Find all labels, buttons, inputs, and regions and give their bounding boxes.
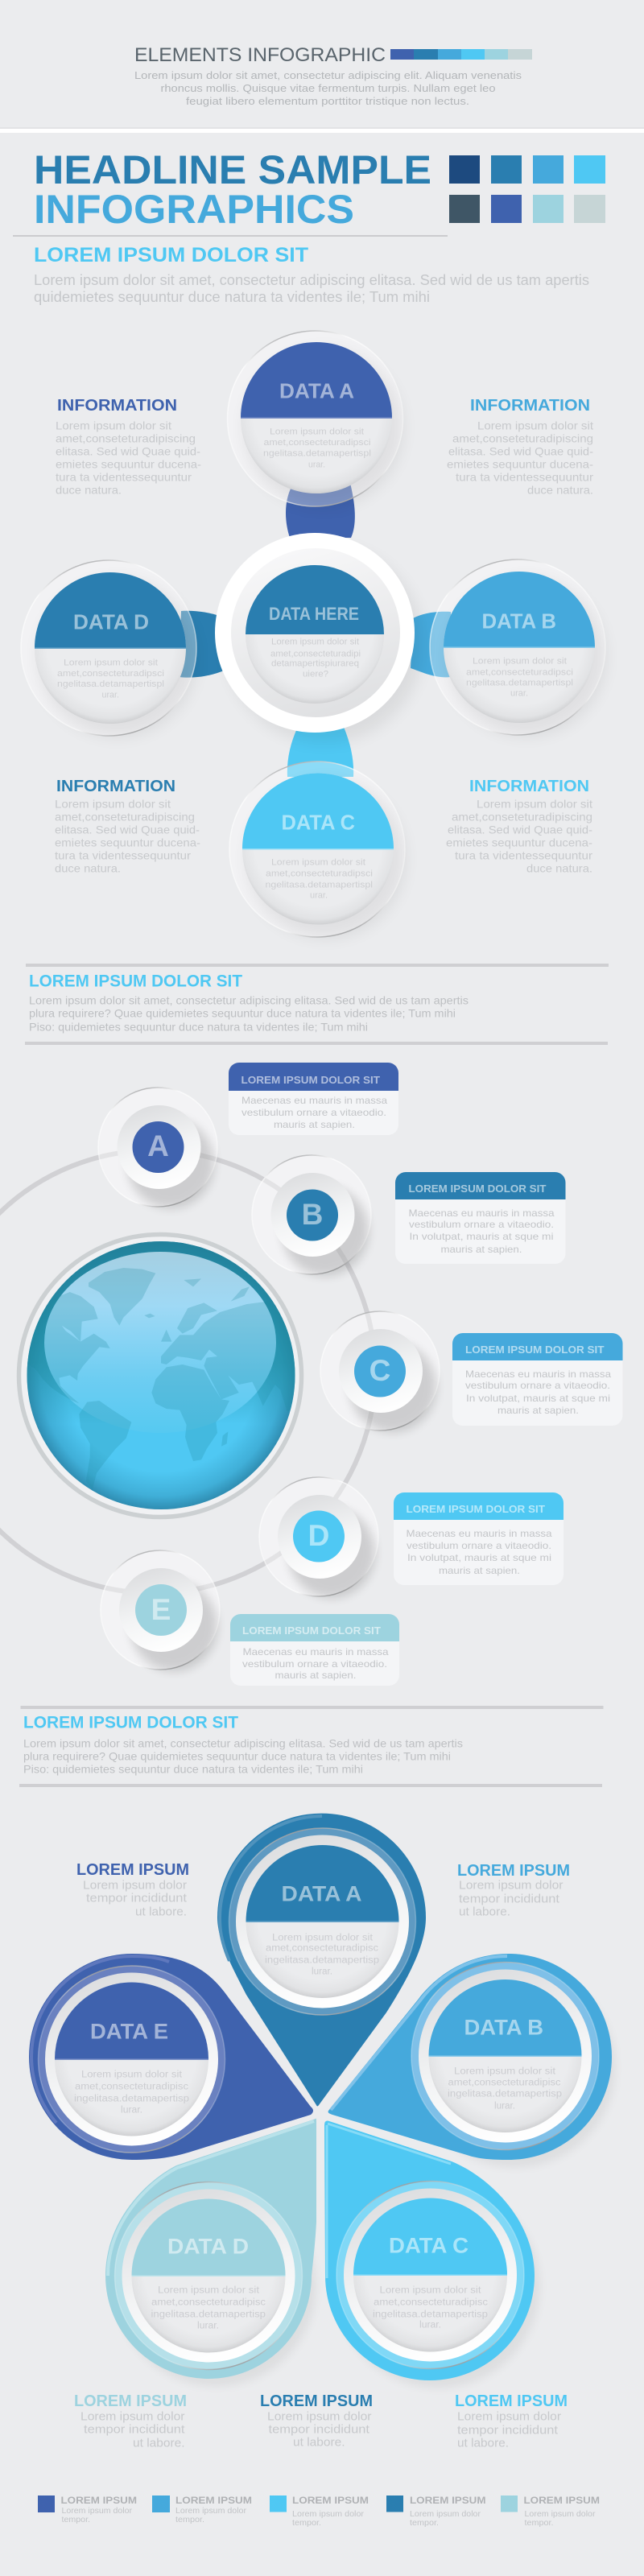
- information: bottom left: emietes sequuntur ducena-: [55, 836, 200, 848]
- section 2 heading: LOREM IPSUM DOLOR SIT: [29, 972, 242, 990]
- pin: data D: amet,consecteturadipisc: [151, 2297, 266, 2307]
- legend item 3: [270, 2496, 369, 2528]
- text: bottom middle label: tempor incididunt: [269, 2423, 370, 2436]
- circle: data C: amet,consecteturadipsci: [266, 869, 373, 879]
- information: top right: [447, 397, 593, 496]
- callout C: Maecenas eu mauris in massa: [465, 1368, 611, 1380]
- connector B: [411, 612, 451, 677]
- callout B: In volutpat, mauris at sque mi: [409, 1231, 554, 1242]
- pin: data C: amet,consecteturadipisc: [374, 2297, 488, 2307]
- legend item 2: [152, 2496, 252, 2524]
- circle: data C: DATA C: [282, 810, 355, 834]
- legend item 5: [501, 2496, 600, 2528]
- circle: data here (centre): uiere?: [303, 670, 328, 679]
- pin: data A: lurar.: [312, 1967, 332, 1977]
- information: bottom left: duce natura.: [55, 861, 121, 874]
- legend item 2: Lorem ipsum dolor: [175, 2507, 247, 2516]
- circle: data D: Lorem ipsum dolor sit: [64, 658, 158, 668]
- information: top left: [56, 397, 201, 496]
- circle: data D: amet,consecteturadipsci: [57, 669, 164, 679]
- callout A: Maecenas eu mauris in massa: [242, 1095, 387, 1106]
- legend item 1: LOREM IPSUM: [61, 2496, 137, 2506]
- callout E: vestibulum ornare a vitaeodio.: [242, 1658, 387, 1670]
- information: bottom left: Lorem ipsum dolor sit: [55, 797, 171, 810]
- circle: data C: [229, 762, 405, 938]
- pin: data A: Lorem ipsum dolor sit: [272, 1934, 374, 1943]
- information: top left: tura ta videntessequuntur: [56, 470, 192, 483]
- circle: data A: [227, 331, 402, 507]
- callout B: [395, 1172, 565, 1264]
- legend item 3: tempor.: [292, 2519, 321, 2528]
- callout D: In volutpat, mauris at sque mi: [407, 1552, 551, 1563]
- information: top right: duce natura.: [527, 483, 593, 496]
- section 3 text: Piso: quidemietes sequuntur duce natura ta videntes ile; Tum mihi: [23, 1763, 363, 1776]
- section 3 text: [23, 1737, 463, 1776]
- legend item 4: Lorem ipsum dolor: [410, 2510, 481, 2519]
- circle: data C: urar.: [310, 890, 328, 900]
- node B: [252, 1155, 371, 1276]
- text: bottom left label: ut labore.: [133, 2436, 185, 2450]
- section 2 text: Piso: quidemietes sequuntur duce natura ta videntes ile; Tum mihi: [29, 1021, 368, 1034]
- information: bottom right: Lorem ipsum dolor sit: [477, 797, 592, 810]
- callout A: vestibulum ornare a vitaeodio.: [242, 1107, 386, 1118]
- node B: B: [302, 1198, 323, 1231]
- pin: data E: DATA E: [90, 2019, 168, 2043]
- pin: data A: DATA A: [282, 1882, 362, 1906]
- legend item 4: LOREM IPSUM: [410, 2496, 486, 2506]
- circle: data D: DATA D: [73, 610, 149, 634]
- pin: data A: amet,consecteturadipisc: [266, 1943, 378, 1953]
- information: bottom left: [55, 778, 200, 874]
- callout E: [230, 1614, 399, 1686]
- legend item 4: tempor.: [410, 2519, 439, 2528]
- intro text: Lorem ipsum dolor sit amet, consectetur adipiscing elit. Aliquam venenatis: [134, 69, 522, 81]
- pin: data D: DATA D: [167, 2235, 249, 2259]
- circle: data B: urar.: [510, 689, 528, 699]
- circle: data A: amet,consecteturadipsci: [264, 438, 370, 448]
- section 1 heading: LOREM IPSUM DOLOR SIT: [34, 244, 308, 266]
- information: top left: amet,conseteturadipiscing: [56, 431, 196, 444]
- text: top left label: Lorem ipsum dolor: [83, 1879, 187, 1892]
- information: top right: elitasa. Sed wid Quae quid-: [448, 444, 593, 457]
- text: bottom right label: tempor incididunt: [457, 2423, 559, 2438]
- pin: data B: ingelitasa.detamapertisp: [448, 2090, 562, 2099]
- callout C: mauris at sapien.: [497, 1405, 579, 1416]
- section 3 heading: LOREM IPSUM DOLOR SIT: [23, 1713, 238, 1732]
- circle: data here (centre): Lorem ipsum dolor sit: [271, 638, 359, 647]
- callout E: Maecenas eu mauris in massa: [243, 1646, 389, 1657]
- headline: HEADLINE SAMPLE: [34, 147, 431, 192]
- text: top right label: ut labore.: [459, 1905, 510, 1919]
- information: top left: elitasa. Sed wid Quae quid-: [56, 444, 200, 457]
- legend item 3: Lorem ipsum dolor: [292, 2510, 365, 2519]
- circle: data B: ngelitasa.detamapertispl: [466, 678, 573, 687]
- legend item 5: LOREM IPSUM: [523, 2496, 600, 2506]
- text: top left label: LOREM IPSUM: [76, 1861, 189, 1879]
- callout C: vestibulum ornare a vitaeodio.: [465, 1380, 610, 1391]
- circle: data A: ngelitasa.detamapertispl: [263, 449, 371, 459]
- callout E: mauris at sapien.: [275, 1670, 356, 1681]
- text: bottom left label: [74, 2392, 187, 2450]
- text: top right label: tempor incididunt: [459, 1892, 560, 1906]
- text: bottom left label: tempor incididunt: [84, 2423, 185, 2436]
- information: bottom right: amet,conseteturadipiscing: [452, 810, 592, 823]
- information: top left: Lorem ipsum dolor sit: [56, 419, 171, 431]
- legend item 2: LOREM IPSUM: [175, 2496, 252, 2506]
- globe: [19, 1235, 301, 1517]
- callout D: LOREM IPSUM DOLOR SIT: [406, 1503, 545, 1515]
- node A: [98, 1088, 217, 1208]
- pin: data B: Lorem ipsum dolor sit: [454, 2067, 556, 2077]
- text: bottom middle label: Lorem ipsum dolor: [267, 2410, 372, 2423]
- legend item 4: [386, 2496, 486, 2528]
- information: bottom left: INFORMATION: [56, 778, 175, 795]
- node C: C: [369, 1354, 390, 1387]
- connector C: [287, 727, 353, 777]
- information: bottom right: tura ta videntessequuntur: [455, 848, 592, 861]
- circle: data B: amet,consecteturadipsci: [466, 668, 573, 678]
- callout D: vestibulum ornare a vitaeodio.: [407, 1540, 551, 1551]
- pin: data E: ingelitasa.detamapertisp: [74, 2095, 189, 2104]
- legend item 3: LOREM IPSUM: [292, 2496, 369, 2506]
- circle: data here (centre): DATA HERE: [269, 604, 359, 624]
- callout A: mauris at sapien.: [274, 1119, 355, 1130]
- node E: E: [151, 1593, 171, 1626]
- section 2 text: plura requirere? Quae quidemietes sequuntur duce natura ta videntes ile; Tum mihi: [29, 1006, 456, 1019]
- information: top right: emietes sequuntur ducena-: [447, 457, 593, 470]
- circle: data here (centre): [215, 533, 423, 742]
- information: top right: INFORMATION: [470, 397, 590, 415]
- pin: data B: amet,consecteturadipisc: [448, 2079, 561, 2088]
- section 1 text: Lorem ipsum dolor sit amet, consectetur adipiscing elitasa. Sed wid de us tam apertis: [34, 272, 589, 288]
- section 2 text: Lorem ipsum dolor sit amet, consectetur adipiscing elitasa. Sed wid de us tam apertis: [29, 993, 469, 1006]
- pin: data B: [328, 1954, 615, 2167]
- world map: [27, 1268, 300, 1489]
- text: top left label: ut labore.: [135, 1905, 187, 1919]
- callout B: LOREM IPSUM DOLOR SIT: [409, 1183, 547, 1195]
- circle: data C: ngelitasa.detamapertispl: [266, 881, 373, 890]
- section 1 text: [34, 272, 589, 305]
- pin: data A: [217, 1814, 426, 2106]
- section 2 text: [29, 993, 469, 1034]
- pin: data C: [324, 2121, 539, 2388]
- pin: data E: [29, 1954, 313, 2160]
- node E: [101, 1550, 220, 1671]
- pin: data E: Lorem ipsum dolor sit: [81, 2070, 183, 2080]
- intro text: feugiat libero elementum porttitor tristique non lectus.: [186, 95, 469, 107]
- pin: data B: DATA B: [464, 2016, 543, 2040]
- information: top left: INFORMATION: [57, 397, 177, 415]
- circle: data A: DATA A: [279, 378, 354, 402]
- pin: data D: Lorem ipsum dolor sit: [158, 2286, 260, 2296]
- text: bottom middle label: [260, 2392, 373, 2449]
- intro text: [134, 69, 522, 107]
- circle: data B: Lorem ipsum dolor sit: [473, 657, 567, 667]
- pin: data A: ingelitasa.detamapertisp: [265, 1956, 379, 1966]
- colour bar: [390, 49, 532, 60]
- section 3 text: Lorem ipsum dolor sit amet, consectetur adipiscing elitasa. Sed wid de us tam apertis: [23, 1737, 463, 1750]
- legend item 2: tempor.: [175, 2516, 204, 2524]
- circle: data here (centre): detamapertispiurareq: [271, 658, 359, 668]
- callout D: mauris at sapien.: [439, 1565, 520, 1576]
- pin: data D: ingelitasa.detamapertisp: [151, 2310, 266, 2320]
- connector A: [286, 483, 355, 538]
- text: top left label: tempor incididunt: [86, 1892, 188, 1905]
- text: top right label: [457, 1862, 570, 1919]
- information: top right: Lorem ipsum dolor sit: [477, 419, 593, 431]
- headline: [34, 147, 431, 232]
- information: top left: emietes sequuntur ducena-: [56, 457, 201, 470]
- circle: data A: urar.: [308, 460, 325, 470]
- circle: data D: [21, 560, 196, 737]
- text: bottom right label: LOREM IPSUM: [455, 2392, 568, 2410]
- text: top right label: Lorem ipsum dolor: [459, 1879, 564, 1892]
- circle: data C: Lorem ipsum dolor sit: [271, 858, 365, 868]
- pin: data E: lurar.: [121, 2106, 142, 2116]
- node C: [320, 1311, 440, 1432]
- pin: data B: lurar.: [494, 2101, 515, 2111]
- callout C: [452, 1333, 623, 1426]
- circle: data A: Lorem ipsum dolor sit: [270, 427, 364, 436]
- text: bottom left label: LOREM IPSUM: [74, 2392, 187, 2410]
- circle: data D: ngelitasa.detamapertispl: [57, 679, 164, 689]
- pin: data E: amet,consecteturadipisc: [75, 2082, 188, 2091]
- information: top right: amet,conseteturadipiscing: [452, 431, 593, 444]
- text: top left label: [76, 1861, 189, 1919]
- callout D: [394, 1492, 564, 1585]
- information: bottom left: elitasa. Sed wid Quae quid-: [55, 823, 200, 836]
- title: ELEMENTS INFOGRAPHIC: [134, 44, 386, 66]
- information: bottom left: amet,conseteturadipiscing: [55, 810, 195, 823]
- callout D: Maecenas eu mauris in massa: [406, 1528, 552, 1539]
- node D: D: [308, 1519, 329, 1552]
- callout C: In volutpat, mauris at sque mi: [466, 1393, 610, 1404]
- text: bottom right label: [455, 2392, 568, 2450]
- palette swatches: [449, 155, 605, 223]
- intro text: rhoncus mollis. Quisque vitae fermentum turpis. Nullam eget leo: [161, 82, 496, 94]
- pin: data D: [105, 2119, 316, 2386]
- text: top right label: LOREM IPSUM: [457, 1862, 570, 1880]
- text: bottom right label: ut labore.: [457, 2436, 509, 2450]
- text: bottom middle label: ut labore.: [293, 2436, 345, 2449]
- legend item 5: Lorem ipsum dolor: [525, 2510, 596, 2519]
- text: bottom middle label: LOREM IPSUM: [260, 2392, 373, 2410]
- information: bottom left: tura ta videntessequuntur: [55, 848, 191, 861]
- globe outer ring: [19, 1235, 301, 1517]
- legend item 1: [38, 2496, 137, 2524]
- legend item 1: Lorem ipsum dolor: [61, 2507, 133, 2516]
- callout E: LOREM IPSUM DOLOR SIT: [242, 1624, 381, 1637]
- information: bottom right: INFORMATION: [469, 778, 589, 795]
- information: bottom right: duce natura.: [526, 861, 592, 874]
- legend: [38, 2496, 600, 2528]
- information: bottom right: emietes sequuntur ducena-: [446, 836, 592, 848]
- information: top left: duce natura.: [56, 483, 122, 496]
- section 3 text: plura requirere? Quae quidemietes sequuntur duce natura ta videntes ile; Tum mihi: [23, 1750, 451, 1763]
- circle: data D: urar.: [101, 691, 119, 700]
- headline: INFOGRAPHICS: [34, 187, 354, 232]
- callout C: LOREM IPSUM DOLOR SIT: [465, 1344, 605, 1356]
- circle: data here (centre): amet,consecteturadipi: [270, 649, 361, 658]
- callout B: Maecenas eu mauris in massa: [409, 1208, 555, 1219]
- callout A: LOREM IPSUM DOLOR SIT: [242, 1074, 380, 1086]
- pin: data C: Lorem ipsum dolor sit: [380, 2286, 481, 2296]
- node A: A: [147, 1129, 169, 1162]
- callout B: vestibulum ornare a vitaeodio.: [409, 1219, 554, 1230]
- circle: data B: DATA B: [481, 609, 556, 633]
- pin: data C: ingelitasa.detamapertisp: [373, 2310, 488, 2320]
- text: bottom left label: Lorem ipsum dolor: [80, 2410, 185, 2423]
- connector D: [179, 611, 224, 678]
- header: elements infographic: [134, 44, 532, 107]
- information: bottom right: elitasa. Sed wid Quae quid-: [448, 823, 592, 836]
- legend item 1: tempor.: [61, 2516, 90, 2524]
- legend item 5: tempor.: [525, 2519, 554, 2528]
- information: bottom right: [446, 778, 592, 874]
- pin: data C: DATA C: [389, 2233, 469, 2257]
- callout B: mauris at sapien.: [441, 1244, 522, 1255]
- pin: data D: lurar.: [197, 2322, 219, 2331]
- text: bottom right label: Lorem ipsum dolor: [457, 2410, 561, 2423]
- callout A: [229, 1063, 398, 1135]
- orbit ring: [0, 1150, 375, 1593]
- information: top right: tura ta videntessequuntur: [456, 470, 593, 483]
- circle: data B: [430, 559, 605, 736]
- pin: data C: lurar.: [419, 2320, 441, 2330]
- node D: [259, 1477, 378, 1598]
- section 1 text: quidemietes sequuntur duce natura ta videntes ile; Tum mihi: [34, 289, 430, 305]
